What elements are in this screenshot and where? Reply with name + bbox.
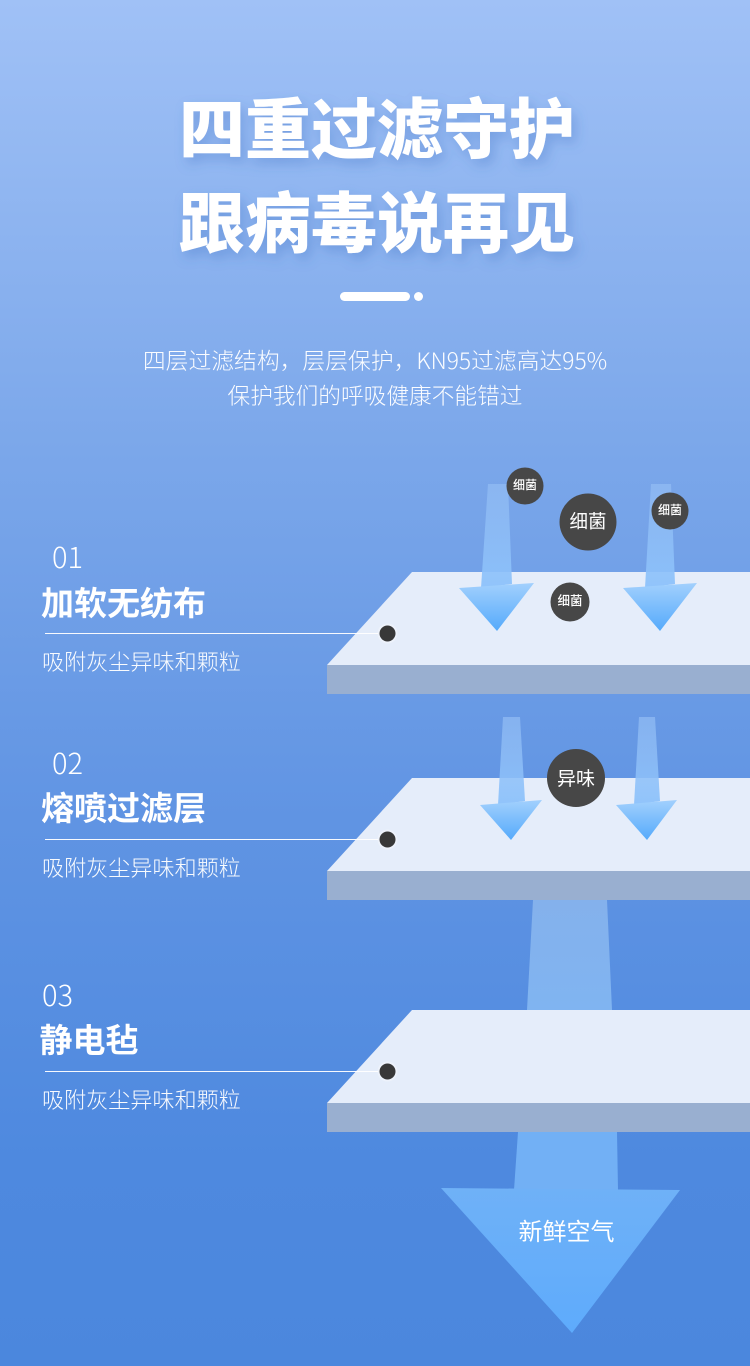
title: 跟病毒说再见 [179,171,575,267]
label 01: 吸附灰尘异味和颗粒 [42,645,241,677]
fresh air arrow: 新鲜空气 [518,1212,614,1247]
label 03: 03 [42,973,73,1015]
bacteria bubble large: 细菌 [569,508,607,534]
layer 1 arrow right [623,484,697,631]
label 01: 01 [52,535,83,577]
bacteria bubble on plate [550,582,590,622]
odor bubble: 异味 [557,764,595,791]
label 03: 静电毡 [40,1014,138,1062]
title [179,77,575,267]
bacteria bubble large [560,494,616,550]
title divider [340,292,423,301]
title: 四重过滤守护 [179,77,575,173]
label 03 [40,973,398,1115]
big fresh air arrow: upper shaft between layer 2 and 3 [527,900,612,1010]
layer 2 arrow right [616,717,677,840]
bacteria bubble small top left [506,468,544,504]
label 01 [41,535,398,677]
label 03: 吸附灰尘异味和颗粒 [42,1083,241,1115]
fresh air arrow [441,1132,680,1333]
label 02: 02 [52,741,83,783]
label 02: 熔喷过滤层 [41,782,206,830]
layer 2 plate [327,778,750,900]
label 02 [41,741,398,883]
layer 1 plate [327,572,750,694]
layer 1 arrow left [459,484,534,631]
label 01: 加软无纺布 [41,577,206,625]
label 02: 吸附灰尘异味和颗粒 [42,851,241,883]
bacteria bubble small top left: 细菌 [513,476,537,493]
odor bubble [547,749,605,807]
bacteria bubble on plate: 细菌 [557,590,583,609]
subtitle: 保护我们的呼吸健康不能错过 [228,378,522,411]
subtitle [143,343,607,411]
bacteria bubble small right [652,492,688,530]
bacteria bubble small right: 细菌 [658,501,682,518]
subtitle: 四层过滤结构，层层保护，KN95过滤高达95% [143,343,607,376]
layer 2 arrow left [480,717,542,840]
layer 3 plate [327,1010,750,1132]
